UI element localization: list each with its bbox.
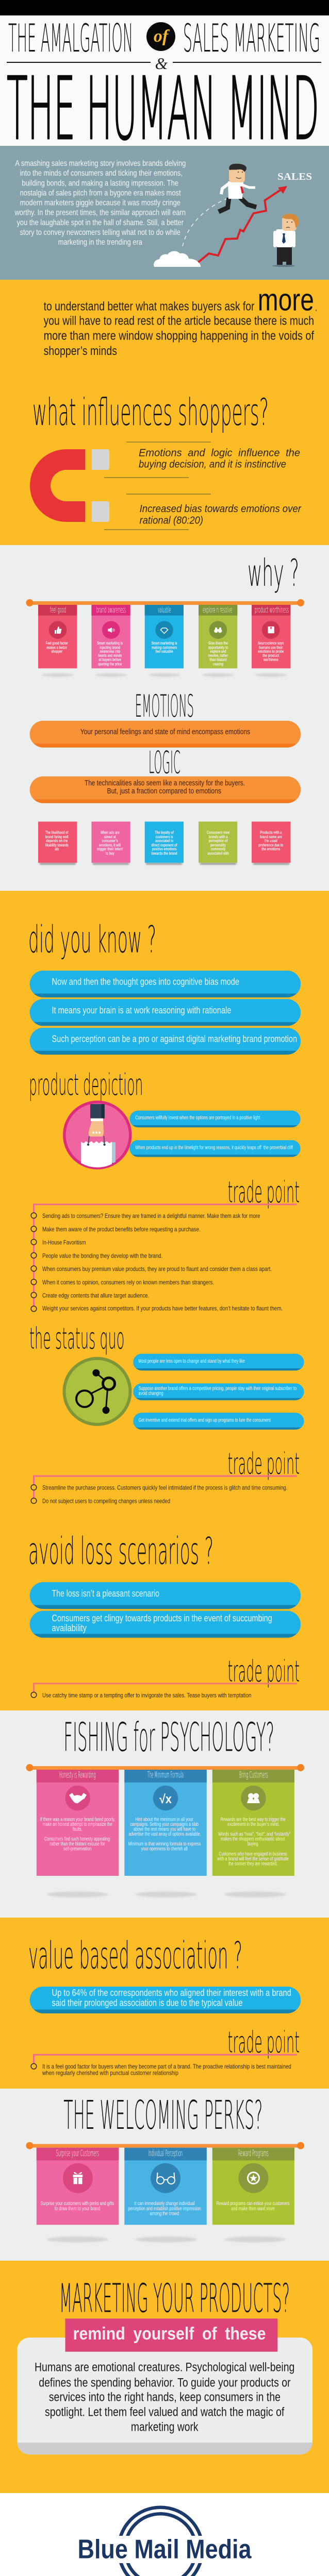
panel: explore n resolve: opportunity to bbox=[208, 645, 228, 650]
panel: product worthiness: emotions to probe bbox=[258, 649, 284, 654]
panel: feel good: shopper bbox=[51, 649, 62, 654]
panel: influence statements: Increased bias towards emotions over bbox=[140, 503, 302, 515]
panel: logic card 4: commonly bbox=[211, 847, 226, 851]
panel: logic card 1: brand faring well bbox=[45, 835, 69, 839]
title: & bbox=[155, 54, 168, 73]
icon: network nodes bbox=[64, 1359, 130, 1425]
illustration: sales growth with businessmen bbox=[154, 164, 312, 267]
badge: of: of bbox=[154, 27, 170, 46]
panel: surprise your customers bbox=[37, 2148, 119, 2225]
callout: clingy consumers: Consumers get clingy towards products in the event of succumbing bbox=[52, 1613, 272, 1623]
icon: megaphone bbox=[108, 628, 114, 633]
icon: hand with shopping bag bbox=[64, 1102, 130, 1170]
list: trade point 1 bbox=[31, 1205, 297, 1312]
callout: logic: The technicalities also seem like a necessity for the buyers. bbox=[85, 778, 245, 787]
panel: reward programs: Reward programs can entice your customers bbox=[217, 2201, 290, 2207]
infographic: did you know ? bbox=[28, 918, 156, 961]
panel: reward programs: and make then want more bbox=[231, 2206, 275, 2212]
callout: cognitive bias: Now and then the thought goes into cognitive bias mode bbox=[52, 977, 239, 987]
panel: logic card 5 bbox=[252, 822, 291, 865]
panel: honesty is rewarding: self-preservation bbox=[63, 1846, 91, 1852]
panel: bring customers: Bring Customers bbox=[239, 1770, 268, 1781]
list: trade point 1: Create edgy contents that allure target audience. bbox=[42, 1292, 149, 1299]
panel: influence statements: rational (80:20) bbox=[140, 515, 203, 527]
intro text: marketing in the trending era bbox=[58, 238, 142, 247]
panel: influence statements: Emotions and logic influence the bbox=[139, 448, 300, 459]
panel: the minimum formula: campaigns. Setting your campaigns a slab bbox=[130, 1822, 199, 1827]
panel: logic card 5: Products with a bbox=[260, 831, 282, 835]
panel: logic card 1 bbox=[38, 822, 77, 865]
panel: explore n resolve: explore and bbox=[210, 649, 226, 654]
banner: remind yourself of these bbox=[65, 2318, 277, 2352]
panel: logic card 5: preference due to bbox=[258, 843, 283, 848]
panel: brand awareness: quoting the price bbox=[98, 662, 122, 667]
panel: bring customers: buying. bbox=[248, 1841, 259, 1847]
panel: logic card 1: depends on the bbox=[46, 839, 68, 843]
intro text: A smashing sales marketing story involves brands delving bbox=[15, 159, 186, 168]
panel: individual perception: among the crowd bbox=[150, 2211, 179, 2217]
callout: 64 percent bbox=[30, 1987, 301, 2013]
panel: explore n resolve: coaxing bbox=[213, 662, 223, 667]
panel: logic card 2: to buy bbox=[106, 851, 114, 856]
panel: logic card 2 bbox=[91, 822, 130, 865]
panel: individual perception bbox=[124, 2148, 207, 2225]
panel: logic card 5: the usual bbox=[265, 839, 277, 843]
panel: logic card 3 bbox=[145, 822, 184, 865]
callout: loss bbox=[30, 1582, 301, 1609]
panel: honesty is rewarding bbox=[37, 1770, 119, 1876]
panel: explore n resolve bbox=[199, 605, 237, 668]
callout: 64 percent: said their prolonged association is due to the typical value bbox=[52, 1997, 242, 2008]
callout: logic bbox=[30, 776, 301, 803]
hanging rod bbox=[26, 1764, 304, 1771]
panel: surprise your customers: Surprise your Customers bbox=[56, 2148, 99, 2159]
panel: honesty is rewarding: faults. bbox=[73, 1826, 82, 1832]
panel: bring customers: excitement in the buyer’s mind. bbox=[227, 1822, 279, 1827]
list: trade point 2: Do not subject users to compelling changes unless needed bbox=[42, 1497, 170, 1504]
panel: brand awareness: of buyers before bbox=[98, 657, 121, 662]
panel: valuable: Smart marketing is bbox=[152, 641, 177, 646]
callout: emotions: Your personal feelings and state of mind encompass emotions bbox=[80, 727, 250, 736]
panel: valuable: feel valuable bbox=[156, 649, 173, 654]
icon: square root x: √x bbox=[159, 1792, 172, 1806]
panel: product worthiness: worthiness bbox=[263, 657, 278, 662]
list: trade point 4 bbox=[31, 2055, 297, 2077]
panel: logic card 4: Consumers view bbox=[207, 831, 230, 835]
icon: diamond bbox=[161, 628, 168, 634]
callout: logic: But, just a fraction compared to emotions bbox=[107, 787, 221, 795]
dashed jump trail bbox=[183, 199, 226, 246]
panel: reward programs: Reward Programs bbox=[238, 2148, 269, 2159]
panel: brand awareness: injecting brand bbox=[100, 645, 120, 650]
icon: book bbox=[268, 626, 274, 633]
panel: honesty is rewarding: rather than the blatant excuse for bbox=[50, 1841, 105, 1847]
callout: positive light bbox=[130, 1111, 300, 1127]
panel: reward programs bbox=[212, 2148, 294, 2225]
callout: positive light: Consumers willfully invest when the options are portrayed in a positive light bbox=[135, 1115, 260, 1121]
intro text: worthy. In the present times, the similar approach will earn bbox=[14, 209, 186, 217]
panel: brand awareness bbox=[91, 605, 130, 668]
panel: product worthiness bbox=[252, 605, 291, 668]
callout: clingy consumers: availability bbox=[52, 1623, 87, 1633]
label: sales: SALES bbox=[277, 171, 312, 182]
panel: bring customers: Customers who have engaged in business bbox=[219, 1851, 287, 1857]
list: trade point 1: People value the bonding they develop with the brand. bbox=[42, 1252, 162, 1259]
list: trade point 1: Sending ads to consumers? Ensure they are framed in a delightful manner. Make them ask for more bbox=[42, 1212, 260, 1219]
panel: honesty is rewarding: If there was a reason your brand fared poorly, bbox=[40, 1817, 115, 1822]
panel: logic card 4: associated with bbox=[207, 851, 229, 856]
list: trade point 2 bbox=[31, 1476, 297, 1504]
panel: valuable bbox=[145, 605, 184, 668]
panel: feel good: makes a better bbox=[46, 645, 67, 650]
intro text: story to convey newcomers telling what not to do while bbox=[20, 228, 180, 237]
panel: logic card 4: personality bbox=[210, 843, 226, 848]
arrow: red sales line bbox=[198, 186, 287, 262]
intro text: modern marketers giggle because it was mostly cringe bbox=[20, 199, 180, 208]
intro call: more bbox=[44, 283, 317, 358]
panel: the minimum formula: advertise the vast array of options available. bbox=[128, 1832, 201, 1837]
panel: the minimum formula: The Minimum Formula bbox=[147, 1770, 184, 1781]
panel: bring customers: Words such as “now”, “fast”, and “instantly” bbox=[218, 1832, 290, 1837]
panel: logic card 4: perception of bbox=[209, 839, 228, 843]
callout: brain at work: It means your brain is at work reasoning with rationale bbox=[52, 1005, 231, 1015]
icon: cloud bbox=[154, 251, 201, 267]
list: trade point 1: When consumers buy premium value products, they are proud to flaunt and consider them a class apart. bbox=[42, 1265, 272, 1273]
list: trade point 4: when regularly cherished with punctual customer relationship bbox=[42, 2070, 178, 2077]
panel: individual perception: Individual Perception bbox=[149, 2148, 183, 2159]
panel: feel good bbox=[38, 605, 77, 668]
intro text: building bonds, and making a lasting impression. The bbox=[22, 179, 178, 188]
card shadows bbox=[46, 2236, 286, 2242]
panel: feel good: feel good bbox=[50, 605, 66, 615]
icon: badge bbox=[248, 2172, 259, 2183]
intro call: more: to understand better what makes buyers ask for bbox=[44, 300, 254, 314]
panel: logic card 2: trigger their intent bbox=[97, 847, 123, 851]
panel: bring customers: with a brand will feel the sense of gratitude bbox=[217, 1856, 289, 1862]
icon: standing businessman bbox=[272, 214, 299, 267]
panel: valuable: making customers bbox=[152, 645, 177, 650]
panel: explore n resolve: Give them the bbox=[208, 641, 228, 646]
panel: logic card 4: brands with a bbox=[209, 835, 228, 839]
list: trade point 3 bbox=[31, 1684, 297, 1699]
icon: thumb bbox=[55, 626, 61, 634]
callout: competitive pricing: avoid changing bbox=[138, 1391, 163, 1397]
infographic: brand awareness bbox=[96, 605, 126, 615]
badge: of bbox=[146, 22, 175, 51]
icon: glasses bbox=[157, 2173, 175, 2184]
panel: honesty is rewarding: Honesty is Rewarding bbox=[59, 1770, 96, 1781]
panel: logic card 2: aimed at bbox=[104, 835, 116, 839]
icon: people bbox=[247, 1793, 260, 1803]
panel: logic card 2: When ads are bbox=[101, 831, 120, 835]
panel: logic card 4 bbox=[199, 822, 237, 865]
panel: product worthiness: humans use their bbox=[259, 645, 283, 650]
list: trade point 3: Use catchy time stamp or a tempting offer to invigorate the sales. Tease buyers with temptation bbox=[42, 1691, 251, 1699]
callout: less open to change: Most people are less open to change and stand by what they like bbox=[138, 1359, 245, 1364]
panel: bring customers: Rewards are the best way to trigger the bbox=[221, 1817, 286, 1822]
panel: honesty is rewarding: make an honest attempt to emphasize the bbox=[43, 1822, 112, 1827]
panel: logic card 2: consumer’s bbox=[102, 839, 118, 843]
icon: jumping businessman bbox=[219, 164, 256, 212]
panel: logic card 3: customers is bbox=[156, 835, 173, 839]
panel: logic card 3: associated to bbox=[155, 839, 173, 843]
hanging rod bbox=[26, 599, 304, 606]
callout: trial offers: Get inventive and extend trial offers and sign up programs to lure the consumers bbox=[138, 1418, 271, 1423]
panel: logic card 3: towards the brand bbox=[152, 851, 177, 856]
panel: reminder card bbox=[17, 2318, 312, 2454]
panel: valuable: valuable bbox=[158, 605, 171, 615]
panel: bring customers: the sooner they are rewarded. bbox=[228, 1861, 278, 1867]
panel: logic card 1: The likelihood of bbox=[45, 831, 69, 835]
callout: trial offers bbox=[133, 1413, 304, 1430]
intro text bbox=[14, 159, 186, 247]
infographic: EMOTIONS bbox=[135, 688, 194, 724]
panel: logic card 1: likability towards bbox=[45, 843, 69, 848]
panel: logic card 5: brand name are bbox=[260, 835, 282, 839]
panel: the minimum formula: Minimum is that winning formula to express bbox=[128, 1841, 201, 1847]
icon: handshake bbox=[69, 1793, 87, 1803]
callout: brain at work bbox=[30, 999, 301, 1026]
infographic: LOGIC bbox=[149, 745, 180, 781]
logo: blue mail media bbox=[77, 2507, 252, 2576]
panel: feel good: Feel good factor bbox=[46, 641, 68, 646]
panel: explore n resolve: resolve, rather bbox=[208, 653, 228, 658]
infographic: the status quo bbox=[29, 1322, 124, 1356]
list: trade point 1: Make them aware of the product benefits before requesting a purchase. bbox=[42, 1226, 201, 1233]
panel: logic card 3: The loyalty of bbox=[155, 831, 174, 835]
infographic: product depiction bbox=[29, 1068, 143, 1102]
list: trade point 1: In-House Favoritism bbox=[42, 1239, 86, 1246]
panel: logic card 5: the emotions bbox=[261, 847, 281, 851]
intro text: you the laughable spot in the hall of shame. Still, a better bbox=[17, 218, 184, 227]
title bbox=[7, 15, 321, 159]
panel: individual perception: perception and establish positive impression bbox=[128, 2206, 201, 2212]
panel: the minimum formula: above the rest means you will have to bbox=[134, 1826, 195, 1832]
banner: remind yourself of these: remind yourself of these bbox=[73, 2324, 266, 2344]
panel: individual perception: It can immediately change individual bbox=[134, 2201, 195, 2207]
panel: brand awareness: hearts and minds bbox=[98, 653, 122, 658]
panel: logic card 3: direct exponent of bbox=[152, 843, 177, 848]
intro text: nostalgia of sales pitch from a bygone era makes most bbox=[20, 189, 181, 198]
intro call: more: more bbox=[258, 283, 314, 317]
callout: clingy consumers bbox=[30, 1611, 301, 1638]
panel: bring customers bbox=[212, 1770, 294, 1876]
intro call: more: shopper’s minds bbox=[44, 344, 117, 358]
callout: less open to change bbox=[133, 1354, 304, 1370]
panel: product worthiness: Neuroscience says bbox=[258, 641, 284, 646]
panel: brand awareness: awareness into bbox=[100, 649, 120, 654]
callout: loss: The loss isn’t a pleasant scenario bbox=[52, 1588, 159, 1599]
panel: the minimum formula: Hint about the minimum in all your bbox=[135, 1817, 193, 1822]
panel: surprise your customers: Surprise your customers with perks and gifts bbox=[41, 2201, 114, 2207]
panel: logic card 3: positive emotions bbox=[152, 847, 177, 851]
callout: cognitive bias bbox=[30, 971, 301, 997]
panel: the minimum formula: your openness to cherish all bbox=[141, 1846, 188, 1852]
reminder text: marketing work bbox=[131, 2420, 199, 2434]
panel: explore n resolve: than blatant bbox=[209, 657, 227, 662]
card shadows bbox=[46, 1892, 286, 1897]
icon: gift bbox=[73, 2172, 83, 2184]
callout: limelight bbox=[130, 1140, 300, 1157]
panel: surprise your customers: to draw them to your brand bbox=[55, 2206, 101, 2212]
callout: emotions bbox=[30, 721, 301, 748]
panel: bring customers: makes the shoppers enthusiastic about bbox=[221, 1837, 285, 1842]
card shadows bbox=[42, 673, 287, 677]
callout: competitive pricing bbox=[133, 1383, 304, 1400]
hanging rod bbox=[26, 2142, 304, 2149]
intro text: into the minds of consumers and ticking their emotions, bbox=[20, 169, 183, 178]
panel: logic card 1: ads bbox=[55, 847, 59, 851]
panel: influence statements: buying decision, and it is instinctive bbox=[139, 459, 286, 470]
icon: magnet bbox=[30, 449, 109, 522]
icon: binoculars bbox=[214, 628, 222, 633]
panel: honesty is rewarding: Consumers find such honesty appealing bbox=[44, 1837, 110, 1842]
list: trade point 1: When it comes to opinion, consumers rely on known members than strangers. bbox=[42, 1279, 214, 1286]
panel: brand awareness: Smart marketing is bbox=[97, 641, 123, 646]
panel: logic card 2: emotions, it will bbox=[99, 843, 121, 848]
bullets bbox=[31, 1213, 37, 1312]
panel: influence statements bbox=[104, 442, 302, 530]
panel: the minimum formula bbox=[124, 1770, 207, 1876]
callout: perception bbox=[30, 1028, 301, 1055]
panel: product worthiness: the product bbox=[262, 653, 279, 658]
logo: blue mail media: Blue Mail Media bbox=[77, 2534, 252, 2564]
reminder text: services into the right hands, keep consumers in the bbox=[49, 2391, 281, 2404]
reminder text bbox=[35, 2360, 294, 2434]
infographic: explore n resolve bbox=[203, 605, 232, 615]
intro call: more: , bbox=[315, 304, 317, 312]
